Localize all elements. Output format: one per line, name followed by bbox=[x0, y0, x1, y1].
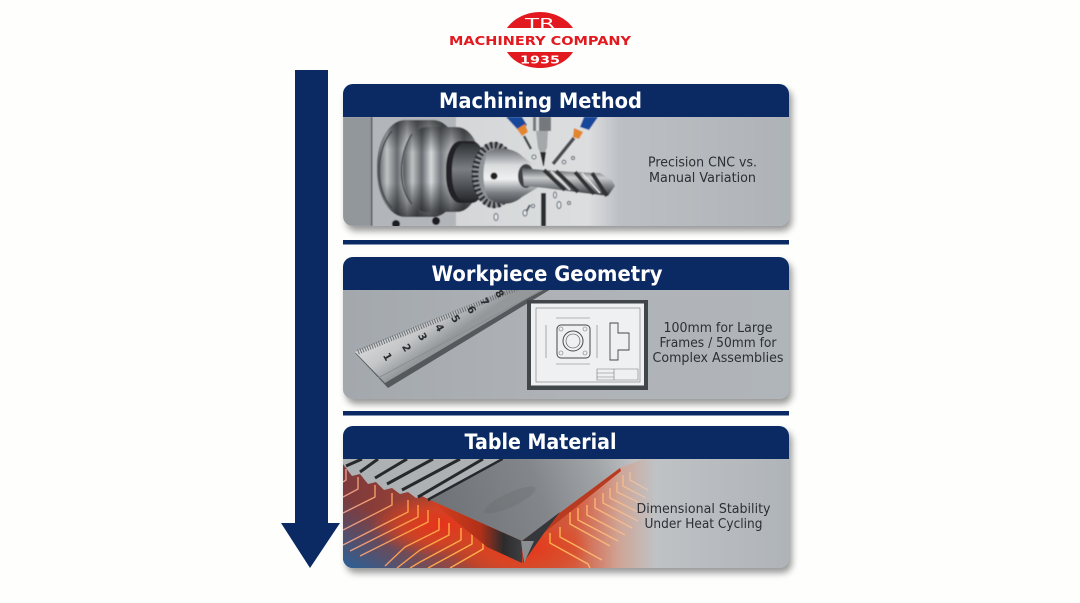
panel: workpiece geometry bbox=[343, 257, 789, 399]
arrow: top to bottom flow bbox=[281, 70, 340, 568]
logo: TR Machinery Company 1935 bbox=[449, 12, 631, 68]
divider bbox=[343, 240, 789, 244]
logo: TR Machinery Company 1935: TR bbox=[523, 16, 555, 32]
heat lines left bbox=[343, 469, 483, 568]
panel image: ruler and drawing: 5 bbox=[448, 313, 462, 325]
panel: table material bbox=[343, 426, 789, 578]
spindle body bbox=[376, 120, 448, 216]
text: dimensional stability: Dimensional Stability bbox=[636, 502, 771, 517]
panel image: ruler and drawing: 4 bbox=[432, 322, 446, 334]
coolant droplets bbox=[494, 155, 574, 220]
text: size guidance: Frames / 50mm for bbox=[660, 336, 777, 351]
panel image: drill and chuck bbox=[343, 117, 618, 226]
toothed ring bbox=[472, 142, 506, 208]
panel image: ruler and drawing: 3 bbox=[415, 331, 429, 343]
chuck nose bbox=[484, 149, 539, 204]
heat lines right bbox=[550, 472, 648, 568]
steel plate top bbox=[430, 459, 642, 541]
panel image: ruler and drawing: 7 bbox=[477, 296, 491, 308]
text: precision cnc bbox=[648, 156, 757, 186]
panel image: ruler and drawing bbox=[343, 290, 648, 399]
blueprint frame bbox=[527, 300, 648, 390]
text: size guidance: 100mm for Large bbox=[664, 321, 772, 336]
text: dimensional stability: Under Heat Cycling bbox=[644, 517, 762, 532]
ribbed steel bbox=[343, 459, 505, 500]
panel image: heated steel plate bbox=[343, 459, 739, 568]
text: precision cnc: Precision CNC vs. bbox=[648, 156, 757, 170]
header bar: workpiece geometry bbox=[343, 257, 789, 290]
heading: machining method: Machining Method bbox=[439, 89, 642, 114]
tool spindles bbox=[533, 117, 551, 131]
logo: TR Machinery Company 1935: 1935 bbox=[520, 54, 560, 66]
header bar: table material bbox=[343, 426, 789, 459]
panel image: ruler and drawing: 6 bbox=[464, 304, 478, 316]
heading: workpiece geometry: Workpiece Geometry bbox=[432, 262, 662, 287]
panel image: ruler and drawing: 8 bbox=[492, 288, 506, 300]
panel: machining method bbox=[343, 84, 789, 228]
header bar: machining method bbox=[343, 84, 789, 117]
logo: TR Machinery Company 1935: MACHINERY COMPANY bbox=[449, 34, 631, 48]
divider bbox=[343, 411, 789, 416]
text: size guidance bbox=[652, 321, 784, 366]
drill bit bbox=[518, 164, 534, 188]
panel image: ruler and drawing: 2 bbox=[399, 342, 413, 354]
heading: table material: Table Material bbox=[464, 430, 616, 455]
plate side faces bbox=[430, 500, 522, 563]
text: precision cnc: Manual Variation bbox=[649, 171, 756, 186]
text: size guidance: Complex Assemblies bbox=[652, 351, 784, 366]
panel image: ruler and drawing: 1 bbox=[380, 351, 394, 363]
text: dimensional stability bbox=[636, 502, 771, 532]
